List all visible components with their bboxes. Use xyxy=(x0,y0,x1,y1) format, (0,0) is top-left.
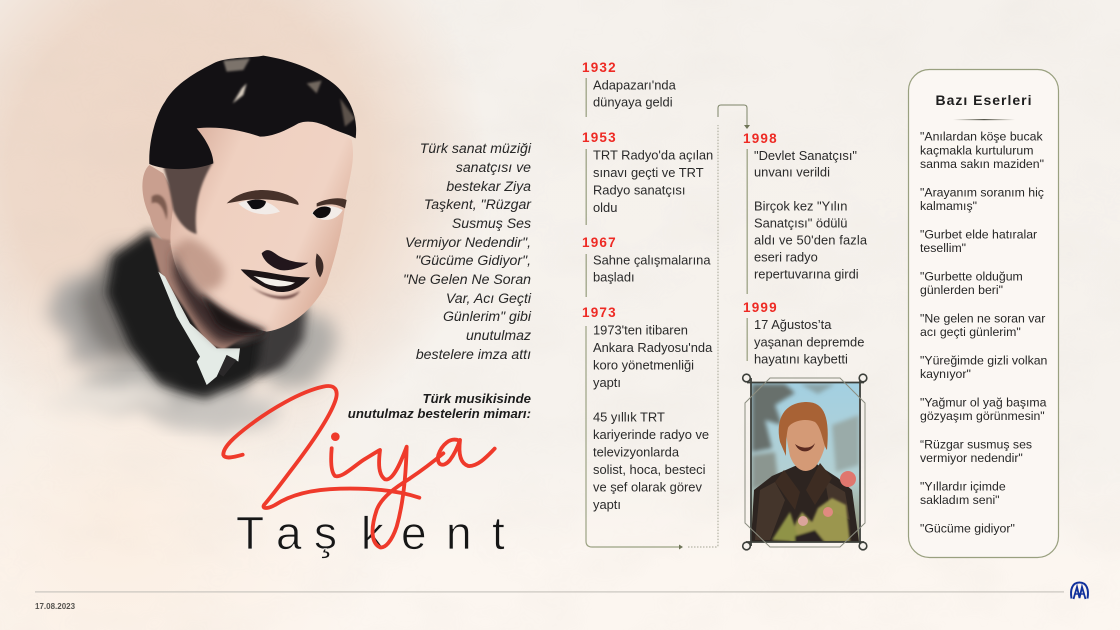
title: Taşkent: Taşkent xyxy=(236,507,505,559)
flowers xyxy=(772,498,850,542)
title: Ziya script xyxy=(223,386,495,547)
list of works: günlerden beri" xyxy=(920,283,1003,297)
timeline entry 1973: yaptı xyxy=(593,375,621,390)
timeline entry 1973: yaptı xyxy=(593,497,621,512)
timeline entry 1998: Birçok kez "Yılın xyxy=(754,198,847,214)
icon: AA logo xyxy=(1071,582,1088,599)
list of works: acı geçti günlerim" xyxy=(920,325,1021,339)
list of works: "Gücüme gidiyor" xyxy=(920,522,1015,536)
intro text: Vermiyor Nedendir", xyxy=(405,234,531,250)
timeline entry 1973: 45 yıllık TRT xyxy=(593,410,665,424)
timeline entry 1998: "Devlet Sanatçısı" xyxy=(754,148,857,163)
list of works: sanma sakın maziden" xyxy=(920,157,1044,171)
intro text: Türk sanat müziği xyxy=(420,140,532,156)
date: 17.08.2023 xyxy=(35,602,76,611)
neck xyxy=(150,237,250,350)
intro text: unutulmaz xyxy=(466,327,531,343)
subtitle: Türk musikisinde xyxy=(423,391,531,406)
timeline entry 1999: 1999 xyxy=(743,300,778,315)
face xyxy=(170,120,353,332)
timeline entry 1953: 1953 xyxy=(582,130,617,145)
jaw shadow xyxy=(173,247,267,343)
subtitle xyxy=(348,391,531,421)
timeline entry 1932: dünyaya geldi xyxy=(593,94,673,110)
list of works: kaynıyor" xyxy=(920,367,971,381)
timeline entry 1998: aldı ve 50'den fazla xyxy=(754,232,868,248)
timeline entry 1967: 1967 xyxy=(582,235,617,250)
list of works: "Ne gelen ne soran var xyxy=(920,312,1045,326)
eyes xyxy=(238,200,280,214)
timeline entry 1998 xyxy=(743,131,868,294)
list of works: "Gurbet elde hatıralar xyxy=(920,228,1037,242)
nose shadow xyxy=(262,250,308,270)
timeline entry 1973: Ankara Radyosu'nda xyxy=(593,340,713,355)
list of works: gözyaşım görünmesin" xyxy=(920,409,1045,423)
list of works: "Anılardan köşe bucak xyxy=(920,130,1043,144)
list of works: "Yıllardır içimde xyxy=(920,480,1006,494)
hair xyxy=(149,56,356,169)
list of works: tesellim" xyxy=(920,241,966,255)
timeline entry 1999: 17 Ağustos’ta xyxy=(754,317,832,332)
timeline entry 1998: eseri radyo xyxy=(754,250,818,264)
shirt xyxy=(751,463,859,542)
timeline entry 1973: 1973'ten itibaren xyxy=(593,322,688,338)
list of works: "Arayanım soranım hiç xyxy=(920,186,1044,200)
intro text xyxy=(403,140,532,362)
panel: Bazı Eserleri xyxy=(908,70,1058,558)
framed photo xyxy=(743,374,867,550)
timeline entry 1973: kariyerinde radyo ve xyxy=(593,427,709,442)
smoke shading around the shoulders xyxy=(48,250,339,430)
list of works: "Yüreğimde gizli volkan xyxy=(920,354,1048,368)
timeline entry 1932: Adapazarı'nda xyxy=(593,78,677,92)
timeline entry 1998: 1998 xyxy=(743,131,778,146)
timeline entry 1999 xyxy=(743,300,864,366)
subtitle: unutulmaz bestelerin mimarı: xyxy=(348,406,531,421)
suit jacket xyxy=(107,230,277,400)
timeline entry 1932: 1932 xyxy=(582,60,617,75)
timeline entry 1967: Sahne çalışmalarına xyxy=(593,252,711,268)
timeline entry 1973: koro yönetmenliği xyxy=(593,358,694,372)
timeline entry 1998: repertuvarına girdi xyxy=(754,266,859,282)
ear xyxy=(142,165,177,243)
timeline connector arrows xyxy=(586,105,750,550)
timeline entry 1973: televizyonlarda xyxy=(593,444,680,460)
photo frame xyxy=(743,374,867,550)
list of works: “Rüzgar susmuş ses xyxy=(920,438,1032,452)
timeline entry 1953: TRT Radyo'da açılan xyxy=(593,148,713,162)
timeline entry 1999: yaşanan depremde xyxy=(754,334,864,350)
timeline entry 1973: solist, hoca, besteci xyxy=(593,462,706,477)
list of works: kalmamış" xyxy=(920,199,977,213)
timeline entry 1998: Sanatçısı" ödülü xyxy=(754,216,847,230)
list of works: sakladım seni" xyxy=(920,493,1000,507)
list of works: "Gurbette olduğum xyxy=(920,270,1023,284)
intro text: Günlerim" gibi xyxy=(443,308,532,324)
portrait: Ziya Taşkent xyxy=(48,56,356,430)
shirt collar xyxy=(158,272,240,385)
timeline entry 1967 xyxy=(582,235,711,297)
timeline entry 1973 xyxy=(582,305,713,512)
intro text: bestekar Ziya xyxy=(446,178,531,194)
intro text: bestelere imza attı xyxy=(416,346,531,362)
timeline entry 1953 xyxy=(582,130,713,225)
intro text: "Ne Gelen Ne Soran xyxy=(403,271,531,287)
timeline entry 1973: 1973 xyxy=(582,305,617,320)
timeline entry 1998: unvanı verildi xyxy=(754,164,830,180)
list of works: "Yağmur ol yağ başıma xyxy=(920,396,1047,410)
mouth xyxy=(241,269,310,292)
head xyxy=(786,420,825,471)
timeline entry 1967: başladı xyxy=(593,270,635,284)
list of works: kaçmakla kurtulurum xyxy=(920,144,1033,158)
smoke over lower edge xyxy=(50,386,275,422)
timeline entry 1953: Radyo sanatçısı xyxy=(593,182,685,198)
intro text: Var, Acı Geçti xyxy=(446,290,532,306)
timeline entry 1999: hayatını kaybetti xyxy=(754,352,848,366)
intro text: "Gücüme Gidiyor", xyxy=(415,252,531,268)
intro text: Taşkent, "Rüzgar xyxy=(424,196,532,212)
list of works xyxy=(920,130,1048,536)
intro text: Susmuş Ses xyxy=(452,215,531,231)
photo xyxy=(751,383,859,542)
timeline entry 1953: sınavı geçti ve TRT xyxy=(593,165,704,180)
sideburn xyxy=(163,162,213,234)
list of works: vermiyor nedendir" xyxy=(920,451,1023,465)
eyebrows xyxy=(227,190,299,205)
panel heading: Bazı Eserleri xyxy=(935,92,1033,108)
timeline entry 1953: oldu xyxy=(593,200,617,215)
timeline entry 1973: ve şef olarak görev xyxy=(593,480,702,494)
timeline entry 1932 xyxy=(582,60,677,117)
intro text: sanatçısı ve xyxy=(456,159,531,175)
